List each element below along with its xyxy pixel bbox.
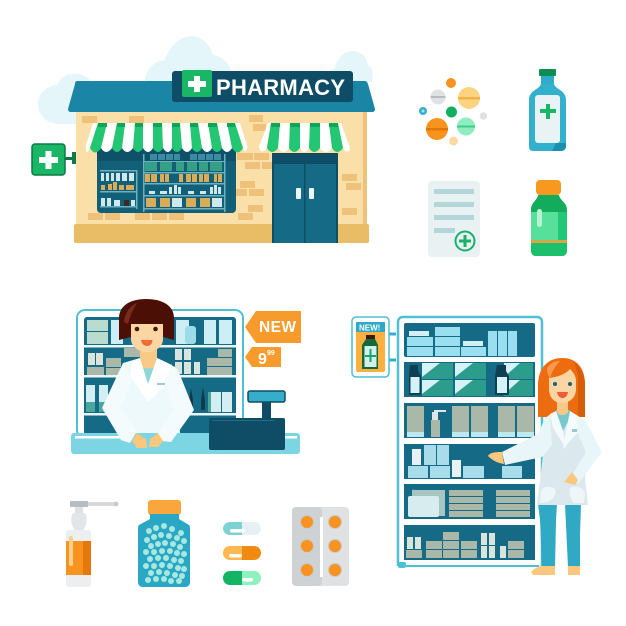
shelves <box>404 323 535 560</box>
collar <box>140 366 157 384</box>
left arm <box>102 363 137 443</box>
bricks <box>82 115 361 220</box>
pharmacist woman <box>488 358 602 575</box>
legs <box>538 504 557 567</box>
shoes <box>531 566 555 575</box>
wall <box>76 110 366 226</box>
face <box>131 324 163 352</box>
new product card: NEW! <box>359 324 380 332</box>
pharmacy sign <box>172 70 353 102</box>
hands <box>488 452 504 464</box>
icon: blue bottle with cross <box>529 69 566 151</box>
shelf 6 goods <box>406 532 524 558</box>
pharmacy building <box>68 81 375 243</box>
awning: door <box>259 123 350 152</box>
sign label: PHARMACY <box>216 75 345 100</box>
shelf frame <box>77 310 243 438</box>
icon: capsules <box>223 522 261 585</box>
lapels <box>550 411 580 449</box>
wall-mounted green cross sign <box>32 144 76 175</box>
right arm <box>157 366 194 442</box>
capsule: orange <box>223 546 261 560</box>
capsule: green <box>223 571 261 585</box>
shelf 2 goods <box>409 363 533 396</box>
panel: pharmacist with tall shelf <box>352 317 602 575</box>
cash register <box>209 391 285 450</box>
hands <box>132 433 163 448</box>
base <box>74 224 369 243</box>
face <box>549 369 576 403</box>
shelf frame <box>398 317 542 568</box>
shelf 3 goods <box>407 406 534 437</box>
shelves <box>84 317 236 435</box>
tag: new <box>245 311 301 343</box>
roof <box>68 81 375 112</box>
icon: prescription document <box>428 181 480 257</box>
neck <box>140 348 157 368</box>
hair <box>119 299 174 340</box>
coat torso <box>118 358 180 433</box>
tag: price <box>245 347 281 368</box>
icon: assorted pills <box>419 78 487 146</box>
window with shelves <box>97 148 236 213</box>
shelf 4 goods <box>408 445 522 478</box>
shelf 1 goods <box>407 327 517 356</box>
pharmacist woman <box>102 299 194 448</box>
tag: price: 99 <box>267 350 275 357</box>
awning: window <box>86 123 247 152</box>
clouds behind pharmacy <box>38 36 373 124</box>
icon: green bottle <box>531 180 567 256</box>
neck and collar <box>556 410 570 431</box>
capsule: teal <box>223 522 261 535</box>
left arm <box>502 416 552 465</box>
door <box>272 153 338 243</box>
tag: new: NEW <box>259 319 296 336</box>
coat torso <box>537 413 588 505</box>
lapels <box>130 358 174 402</box>
icon: jar of granules <box>138 500 190 587</box>
right arm <box>571 416 602 484</box>
sign cross icon <box>182 70 212 97</box>
pockets <box>540 486 585 503</box>
tag: price: 9 <box>258 351 267 368</box>
hair <box>538 358 585 417</box>
icon: spray bottle <box>66 501 118 587</box>
new product card <box>352 317 396 377</box>
shelf 5 goods <box>408 490 530 517</box>
icon: blister pack <box>292 507 349 586</box>
shelf goods <box>86 320 232 412</box>
counter <box>71 433 300 454</box>
panel: pharmacist at counter <box>71 299 301 454</box>
